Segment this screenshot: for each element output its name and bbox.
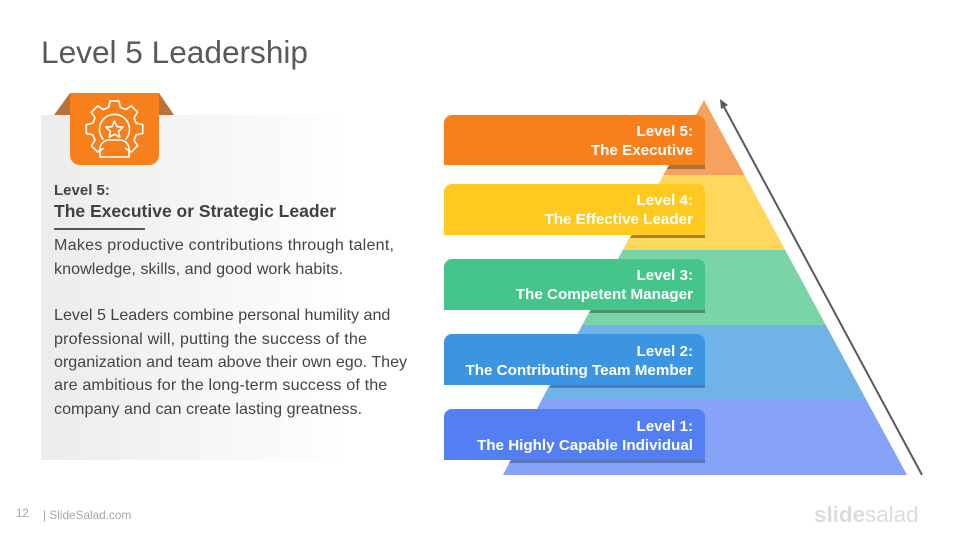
label: level 4 the effective leader — [444, 184, 705, 235]
label: level 5 the executive: The Executive — [591, 142, 693, 159]
text block: description: Makes productive contributions through talent, — [54, 236, 394, 254]
label: level 5 the executive — [444, 115, 705, 165]
panel: level 5 description background — [41, 115, 351, 460]
footer source: | SlideSalad.com — [43, 508, 131, 522]
text block: description: are ambitious for the long-term success of the — [54, 376, 387, 394]
label: level 2 the contributing team member: The Contributing Team Member — [465, 362, 693, 379]
title: Level 5 Leadership — [41, 34, 308, 70]
label: level 2 the contributing team member: Level 2: — [636, 343, 693, 360]
logo: slidesalad: slidesalad — [814, 502, 919, 527]
label: level 3 the competent manager — [444, 259, 705, 310]
text block: description: Level 5 Leaders combine personal humility and — [54, 306, 390, 324]
label: level 1 the highly capable individual: The Highly Capable Individual — [477, 437, 693, 454]
heading: level 5: Level 5: — [54, 182, 110, 199]
label: level 1 the highly capable individual: Level 1: — [636, 418, 693, 435]
label shadows — [509, 165, 705, 463]
text block: description: knowledge, skills, and good work habits. — [54, 260, 343, 278]
label: level 2 the contributing team member — [444, 334, 705, 385]
page number: 12 — [16, 508, 29, 520]
label: level 4 the effective leader: Level 4: — [636, 192, 693, 209]
text block: description: professional will, putting the success of the — [54, 330, 367, 348]
label: level 3 the competent manager: Level 3: — [636, 267, 693, 284]
icon: ribbon with gear and star — [54, 93, 174, 165]
text block: description — [54, 236, 407, 418]
text block: description: company and can create lasting greatness. — [54, 400, 362, 418]
label: level 5 the executive: Level 5: — [636, 123, 693, 140]
divider — [54, 228, 145, 230]
label: level 3 the competent manager: The Competent Manager — [516, 286, 693, 303]
text block: description: organization and team above their own ego. They — [54, 353, 407, 371]
heading: executive or strategic leader: The Executive or Strategic Leader — [54, 201, 336, 221]
label: level 4 the effective leader: The Effective Leader — [544, 211, 693, 228]
label: level 1 the highly capable individual — [444, 409, 705, 460]
